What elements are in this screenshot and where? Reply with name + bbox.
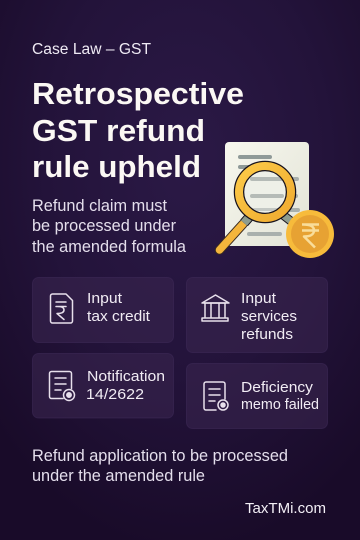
title: Retrospective [32, 76, 244, 111]
label: memo failed [241, 397, 319, 413]
icon: rupee document [50, 294, 72, 323]
panel: input tax credit [32, 278, 174, 342]
icon: rupee coin [286, 210, 334, 258]
subtitle: be processed under [32, 217, 176, 235]
subtitle: Refund claim must [32, 197, 167, 215]
label: tax credit [87, 308, 151, 325]
title: rule upheld [32, 149, 201, 184]
panel: input services refunds [186, 278, 328, 352]
panel: notification 14/2622 [32, 354, 174, 418]
label: Deficiency [241, 379, 314, 396]
source: TaxTMi.com: TaxTMi.com [245, 501, 326, 517]
label: Notification [87, 368, 165, 385]
panel: deficiency memo failed [186, 364, 328, 428]
label: services [241, 308, 297, 325]
conclusion text: Refund application to be processed [32, 447, 288, 465]
label: Input [241, 290, 277, 307]
subtitle: the amended formula [32, 238, 187, 256]
label: refunds [241, 326, 293, 343]
title [32, 76, 244, 184]
label: 14/2622 [86, 386, 144, 403]
subtitle [32, 197, 187, 256]
eyebrow: Case Law – GST: Case Law – GST [32, 41, 152, 58]
label [241, 290, 297, 343]
conclusion text: under the amended rule [32, 467, 205, 485]
document [225, 142, 309, 246]
icon: bank building [202, 295, 229, 321]
label [86, 368, 165, 403]
label: Input [87, 290, 123, 307]
icon: document with seal [204, 382, 228, 410]
icon: magnifying glass [220, 166, 292, 250]
icon: document with seal [50, 372, 74, 400]
title: GST refund [32, 113, 205, 148]
conclusion text [32, 447, 288, 485]
label [241, 379, 319, 413]
label [87, 290, 151, 325]
illustration: document, magnifier and rupee coin [220, 142, 334, 258]
